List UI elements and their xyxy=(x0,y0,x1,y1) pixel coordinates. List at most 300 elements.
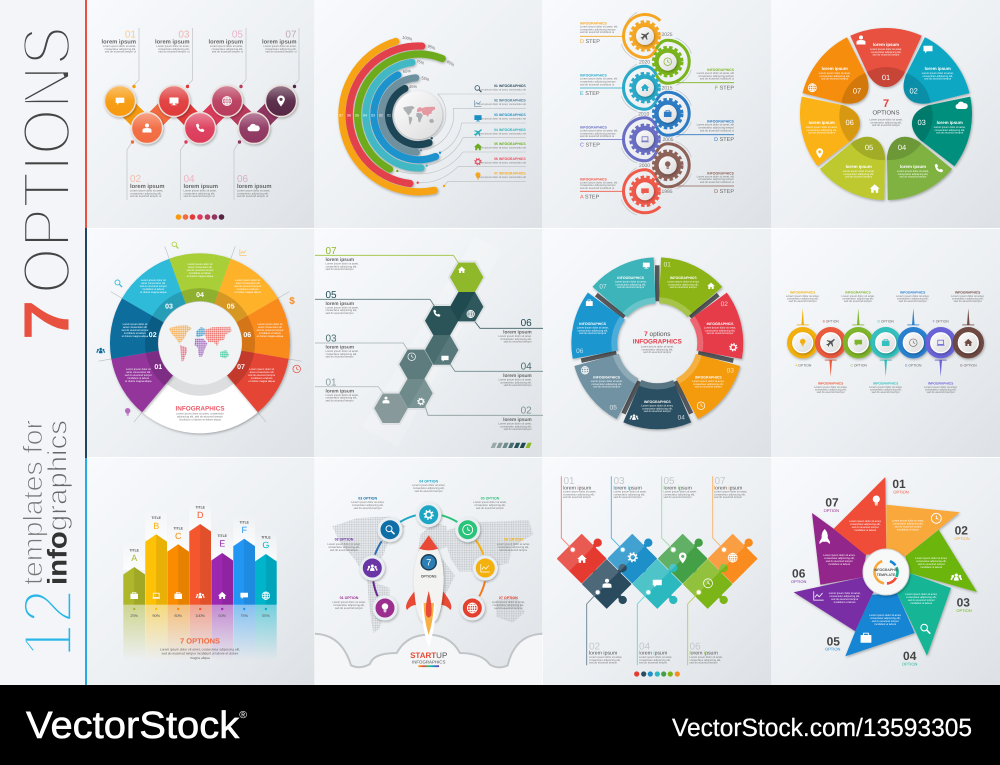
rocket nose xyxy=(419,535,438,550)
chart caption: magna aliqua xyxy=(190,656,210,660)
sector inner bands xyxy=(143,288,257,387)
hexagon icons xyxy=(383,267,474,405)
piece numbers: 04 xyxy=(639,642,651,653)
left labels: 03 xyxy=(326,334,337,344)
piece titles: lorem ipsum xyxy=(614,486,642,492)
left labels: consectetur adipiscing elit, xyxy=(326,309,357,312)
piece text: Lorem ipsum dolor sit amet, xyxy=(563,490,596,494)
left steps: E STEP xyxy=(580,91,600,97)
panel: seven section ring xyxy=(543,229,772,457)
sidebar heading: infographics: infographics xyxy=(42,420,72,585)
label 01: sed do eiusmod tempor ut xyxy=(105,51,136,54)
segment text: sed do eiusmod tempor xyxy=(579,332,606,335)
startup title: STARTUP xyxy=(410,651,447,660)
option labels xyxy=(795,320,977,368)
palette dots xyxy=(634,671,680,677)
left label text: sed do eiusmod incididunt ut xyxy=(580,135,614,138)
sector text: Lorem ipsum dolor sit xyxy=(235,279,260,282)
segment numbers: 06 xyxy=(576,348,584,355)
puzzle piece: lime xyxy=(684,560,732,608)
blade text: sed do eiusmod tempor xyxy=(908,599,935,602)
panel background xyxy=(315,0,542,228)
petal body text: sed do eiusmod tempor xyxy=(808,132,835,135)
panel background xyxy=(772,458,1000,685)
blade text: Lorem ipsum dolor sit amet, xyxy=(915,557,948,560)
sector text: Lorem ipsum dolor sit xyxy=(126,368,151,371)
option words: OPTION xyxy=(902,662,917,666)
petal body text: sed do eiusmod tempor xyxy=(924,78,951,81)
option descriptions: Lorem ipsum dolor sit amet, xyxy=(473,501,507,504)
sector text: incididunt ut labore xyxy=(251,377,273,380)
segment numbers: 07 xyxy=(599,284,607,291)
label 07: Lorem ipsum dolor sit amet, xyxy=(263,45,297,48)
sector text: et dolore magna aliqua xyxy=(122,335,149,338)
sector text: sed do eiusmod tempor xyxy=(140,285,167,288)
piece numbers: 03 xyxy=(614,476,625,487)
petal body text: Lorem ipsum dolor sit amet, xyxy=(819,72,851,75)
option numbers: 04 xyxy=(903,649,917,663)
arc numbers: 01 xyxy=(387,114,391,118)
bottom text: Lorem ipsum dolor sit amet, xyxy=(869,386,903,389)
puzzle piece: red xyxy=(558,535,606,583)
center heading: 7 options xyxy=(644,331,671,338)
right labels: lorem ipsum xyxy=(503,330,532,336)
option words: OPTION xyxy=(824,508,839,513)
divider: navy xyxy=(85,228,87,458)
bottom titles: INFOGRAPHICS xyxy=(818,382,844,386)
hex diagonal sheen xyxy=(399,292,483,423)
petal titles: lorem ipsum xyxy=(925,66,951,71)
label 01: consectetur adipiscing elit, xyxy=(104,48,136,51)
segment text xyxy=(577,280,736,413)
option descriptions: consectetur adipiscing elit, xyxy=(333,604,365,607)
petal numbers: 04 xyxy=(898,143,906,152)
option descriptions xyxy=(327,484,530,610)
bar letters: C xyxy=(175,531,182,541)
tick lines xyxy=(99,246,301,422)
option descriptions: sed do eiusmod tempor xyxy=(476,507,504,510)
panel: hexagon chain xyxy=(315,229,543,457)
option labels: C OPTION xyxy=(850,364,867,368)
white sector label: adipiscing elit, sed do eiusmod tempor xyxy=(177,416,223,418)
label 04: sed do eiusmod tempor ut xyxy=(184,195,215,198)
sector text: et dolore magna aliqua xyxy=(140,291,167,294)
puzzle piece: navy xyxy=(583,560,631,608)
faint diagonal stripe xyxy=(362,237,502,447)
option words: OPTION xyxy=(956,608,972,613)
right label text: consectetur adipiscing tempor xyxy=(698,178,734,181)
left labels: INFOGRAPHICS xyxy=(580,22,608,26)
rainbow bar xyxy=(418,665,439,667)
center world map xyxy=(403,106,435,125)
blade text: sed do eiusmod tempor xyxy=(872,620,899,623)
bottom text: Lorem ipsum dolor sit amet, xyxy=(814,386,848,389)
piece text: consectetur adipiscing elit, xyxy=(614,493,645,496)
option descriptions: consectetur adipiscing elit, xyxy=(474,504,506,507)
segment icons xyxy=(581,263,737,420)
panel background xyxy=(87,458,314,685)
dotted world map xyxy=(332,516,533,633)
bar letters: D xyxy=(197,510,204,520)
option labels: 06 OPTION xyxy=(504,538,523,542)
left label text: sed do eiusmod incididunt ut xyxy=(580,31,614,34)
right label text: consectetur adipiscing tempor xyxy=(698,126,734,130)
legend descriptions: Lorem ipsum dolor sit amet, consectetur elit xyxy=(477,176,526,179)
center heading: INFOGRAPHICS xyxy=(633,338,683,346)
right label text: Lorem ipsum dolor sit amet, elit xyxy=(697,124,734,127)
sector text: sed do eiusmod tempor xyxy=(234,285,261,288)
piece text: sed do eiusmod tempor xyxy=(614,496,642,499)
sector text: incididunt ut labore xyxy=(189,272,211,275)
years: 2015 xyxy=(661,86,673,92)
option descriptions: consectetur adipiscing elit, xyxy=(498,546,529,549)
petal body text: consectetur adipiscing elit, xyxy=(843,173,874,176)
puzzle piece: blue xyxy=(608,535,656,583)
pale backing strips xyxy=(123,500,277,570)
piece highlights xyxy=(557,534,745,596)
petal titles: lorem ipsum xyxy=(873,42,899,47)
gear icons xyxy=(641,32,671,195)
option labels: G OPTION xyxy=(960,364,977,368)
sector text: amet consectetur elit xyxy=(123,326,147,329)
option descriptions: sed do eiusmod tempor xyxy=(335,607,363,610)
right labels: consectetur adipiscing elit, xyxy=(500,381,532,384)
TITLE labels: TITLE xyxy=(151,516,162,520)
piece icons xyxy=(577,552,737,588)
top text: Lorem ipsum dolor sit amet, xyxy=(841,295,875,298)
arc numbers: 07 xyxy=(339,114,343,118)
chart caption xyxy=(160,636,240,660)
top titles: INFOGRAPHICS xyxy=(955,290,981,294)
left label text: consectetur adipiscing tempor xyxy=(580,28,616,31)
right labels: sed do eiusmod tempor xyxy=(504,428,532,431)
right labels xyxy=(707,68,735,175)
petal titles: lorem ipsum xyxy=(900,164,926,169)
label 02: sed do eiusmod tempor ut xyxy=(130,195,161,198)
blade text: Lorem ipsum dolor sit amet, xyxy=(869,614,902,617)
piece numbers: 06 xyxy=(690,642,701,653)
option circles xyxy=(104,86,296,144)
legend text: 01 INFOGRAPHICS xyxy=(494,84,526,88)
label 02 xyxy=(130,174,164,198)
striped legend xyxy=(491,443,532,448)
white sector label: Lorem ipsum dolor sit amet, consectetur xyxy=(176,412,224,416)
panel: pinwheel xyxy=(772,458,1000,685)
center colored ring xyxy=(870,556,902,588)
segment numbers: 03 xyxy=(727,368,734,375)
top text: sed do eiusmod tempor xyxy=(899,300,927,303)
center heading: sed do eiusmod tempor xyxy=(643,351,671,354)
legend text: 02 INFOGRAPHICS xyxy=(494,98,526,102)
segment text: Lorem ipsum dolor sit amet, xyxy=(704,326,736,330)
left labels: consectetur adipiscing elit, xyxy=(326,353,357,356)
segment numbers: 04 xyxy=(678,415,685,422)
right labels: INFOGRAPHICS xyxy=(707,68,735,72)
left labels: Lorem ipsum dolor sit amet, xyxy=(326,394,359,397)
label 05: sed do eiusmod tempor ut xyxy=(212,51,243,54)
petal body text: Lorem ipsum dolor sit amet, xyxy=(806,126,838,129)
left label text: consectetur adipiscing tempor xyxy=(580,80,616,84)
piece text: Lorem ipsum dolor sit amet, xyxy=(714,490,747,494)
percentage labels: 85% xyxy=(446,59,456,68)
petal titles: lorem ipsum xyxy=(846,164,872,169)
piece text: sed do eiusmod tempor xyxy=(639,662,667,665)
arc numbers: 02 xyxy=(379,114,383,118)
left labels: lorem ipsum xyxy=(326,301,354,307)
right labels: lorem ipsum xyxy=(503,417,532,423)
option words: OPTION xyxy=(954,536,970,541)
sector text: et dolore magna aliqua xyxy=(257,335,284,338)
petal titles: lorem ipsum xyxy=(937,120,963,125)
option icons xyxy=(367,510,490,613)
left labels: 01 xyxy=(326,377,337,388)
years: 2020 xyxy=(639,60,650,66)
segment numbers: 05 xyxy=(610,405,617,412)
piece titles: lorem ipsum xyxy=(690,650,718,656)
chart caption: sed do eiusmod tempor incididunt ut labore et dolore xyxy=(162,652,239,656)
sector numbers xyxy=(149,292,251,371)
petal numbers: 03 xyxy=(918,118,926,127)
blade text: Lorem ipsum dolor sit amet, xyxy=(905,593,938,596)
TITLE labels: TITLE xyxy=(261,536,271,540)
segment text: consectetur adipiscing elit, xyxy=(705,329,735,332)
label 01: lorem ipsum xyxy=(102,38,136,46)
legend descriptions: Lorem ipsum dolor sit amet, consectetur elit xyxy=(477,88,526,92)
option numbers: 07 xyxy=(825,496,839,510)
arc numbers: 04 xyxy=(363,114,367,118)
option numbers: 06 xyxy=(792,567,806,581)
label 03 xyxy=(155,30,190,54)
legend icons xyxy=(474,86,482,179)
panel: arrow bar chart xyxy=(87,458,314,685)
option descriptions: sed do eiusmod tempor xyxy=(354,507,382,510)
option labels: A OPTION xyxy=(795,364,812,368)
label 06 xyxy=(237,174,271,198)
petal body text: Lorem ipsum dolor sit amet, xyxy=(870,48,902,51)
rocket flame xyxy=(422,591,435,648)
palette dots xyxy=(176,214,224,220)
percentage labels: 55% xyxy=(421,75,430,82)
outer icons xyxy=(96,242,300,416)
petal numbers: 01 xyxy=(882,73,890,82)
blade text: consectetur adipiscing elit, xyxy=(906,596,937,599)
sector numbers: 03 xyxy=(165,304,173,310)
concentric arcs xyxy=(342,41,442,192)
value labels: 60% xyxy=(174,614,183,618)
sidebar background xyxy=(0,0,85,685)
leader lines xyxy=(315,255,543,415)
legend text: 03 INFOGRAPHICS xyxy=(494,113,526,117)
blade text: consectetur adipiscing elit, xyxy=(850,523,881,526)
left steps xyxy=(580,39,600,200)
option labels: F OPTION xyxy=(933,320,949,324)
option words xyxy=(791,490,972,666)
hexagons xyxy=(374,263,483,423)
sector numbers: 01 xyxy=(154,364,162,371)
left labels: INFOGRAPHICS xyxy=(580,126,608,130)
left label text: Lorem ipsum dolor sit amet, elit xyxy=(580,181,618,184)
value labels: 75% xyxy=(240,614,249,618)
rocket fins xyxy=(406,591,451,610)
right label text: Lorem ipsum dolor sit amet, elit xyxy=(697,175,734,178)
startup title xyxy=(410,651,447,664)
sidebar heading: 12: 12 xyxy=(9,589,87,658)
blade text: sed do eiusmod tempor xyxy=(918,563,945,566)
top text xyxy=(786,295,985,303)
right steps: D STEP xyxy=(714,137,734,143)
option words: OPTION xyxy=(791,579,806,584)
blade icons xyxy=(814,495,962,643)
bottom text: consectetur adipiscing elit, xyxy=(870,388,902,392)
option descriptions: sed do eiusmod tempor xyxy=(499,549,527,552)
option numbers: 05 xyxy=(827,634,840,648)
colored world map xyxy=(169,325,232,362)
blade text: incididunt ut labore xyxy=(874,623,897,626)
sector text: amet consectetur elit xyxy=(141,282,166,285)
left labels: 05 xyxy=(326,290,337,301)
label 03: 03 xyxy=(178,30,190,40)
option labels: D OPTION xyxy=(877,320,894,324)
top text: Lorem ipsum dolor sit amet, xyxy=(896,295,930,298)
sector text: amet consectetur elit xyxy=(236,282,260,285)
left label text: Lorem ipsum dolor sit amet, elit xyxy=(580,26,618,28)
panel: gear timeline xyxy=(543,0,772,228)
legend descriptions: Lorem ipsum dolor sit amet, consectetur elit xyxy=(477,161,526,164)
sector text: incididunt ut labore xyxy=(127,377,150,380)
segment text: Lorem ipsum dolor sit amet, xyxy=(667,280,700,284)
gear hubs xyxy=(636,27,677,200)
center text: TEMPLATE xyxy=(877,573,896,577)
sidebar heading: 7: 7 xyxy=(10,300,82,340)
thin grey arcs xyxy=(621,12,691,215)
petal body text: consectetur adipiscing elit, xyxy=(898,173,928,176)
bar letters: B xyxy=(153,521,159,531)
center heading: Lorem ipsum dolor sit amet, xyxy=(869,118,903,122)
panel background xyxy=(87,229,314,457)
label 01: Lorem ipsum dolor sit amet, xyxy=(103,45,136,48)
option descriptions: consectetur adipiscing elit, xyxy=(413,487,445,490)
petal tabs xyxy=(836,67,936,165)
startup title: INFOGRAPHICS xyxy=(412,660,445,664)
label 02: consectetur adipiscing elit, xyxy=(130,192,162,195)
sector text: Lorem ipsum dolor sit xyxy=(188,263,213,266)
petal body text: consectetur adipiscing elit, xyxy=(806,129,837,132)
right steps xyxy=(714,86,734,195)
zigzag connectors xyxy=(120,101,281,128)
label 01: 01 xyxy=(125,30,136,40)
arc numbers xyxy=(339,114,391,118)
white sector label: INFOGRAPHICS xyxy=(176,406,225,412)
legend descriptions: Lorem ipsum dolor sit amet, consectetur elit xyxy=(477,118,526,120)
petal body text: consectetur adipiscing elit, xyxy=(871,51,901,54)
sector text xyxy=(121,263,284,383)
option labels xyxy=(335,479,523,600)
option labels: 01 OPTION xyxy=(340,596,359,600)
TITLE labels: TITLE xyxy=(129,548,140,552)
blade text: consectetur adipiscing elit, xyxy=(893,522,923,526)
segment titles: INFOGRAPHICS xyxy=(579,322,607,326)
piece text: consectetur adipiscing elit, xyxy=(664,493,695,496)
rocket window xyxy=(421,555,436,570)
sector text: Lorem ipsum dolor sit xyxy=(258,323,283,326)
sector numbers: 06 xyxy=(243,332,251,339)
top text: consectetur adipiscing elit, xyxy=(787,298,819,300)
left labels: INFOGRAPHICS xyxy=(580,74,608,78)
left labels: consectetur adipiscing elit, xyxy=(326,265,357,268)
top text: consectetur adipiscing elit, xyxy=(842,298,874,300)
center heading xyxy=(869,98,903,127)
sector numbers: 07 xyxy=(237,364,245,371)
panel: timeline of round buttons xyxy=(87,0,314,228)
top titles xyxy=(790,290,981,294)
option numbers: 02 xyxy=(955,523,968,537)
TITLE labels xyxy=(129,506,271,552)
label 07 xyxy=(262,30,297,54)
bar letters: A xyxy=(131,553,137,563)
right steps: F STEP xyxy=(715,86,734,92)
piece text: consectetur adipiscing elit, xyxy=(639,659,671,662)
right labels: INFOGRAPHICS xyxy=(707,171,735,175)
left labels: sed do eiusmod tempor xyxy=(326,399,354,402)
center heading: consectetur adipiscing elit, xyxy=(870,121,902,124)
hexagon halo xyxy=(374,263,483,423)
option numbers: 01 xyxy=(892,477,906,491)
center text: INFOGRAPHIC xyxy=(874,568,899,572)
divider: red xyxy=(85,0,87,228)
center heading: 7 xyxy=(883,98,889,110)
rocket window number: 7 xyxy=(426,558,431,568)
white sector xyxy=(142,374,258,433)
segment text: consectetur adipiscing elit, xyxy=(577,329,608,332)
segment text: consectetur adipiscing elit, xyxy=(693,383,724,386)
piece titles: lorem ipsum xyxy=(589,650,617,656)
label 07: sed do eiusmod tempor ut xyxy=(265,51,297,54)
petal body text: Lorem ipsum dolor sit amet, xyxy=(897,170,929,173)
leader rings xyxy=(570,547,726,595)
legend text xyxy=(494,84,526,175)
segment text: consectetur adipiscing elit, xyxy=(668,283,699,286)
segment titles: INFOGRAPHICS xyxy=(695,376,722,380)
value labels: 50% xyxy=(218,614,227,618)
piece text xyxy=(563,490,747,665)
right label text: Lorem ipsum dolor sit amet, elit xyxy=(697,72,734,75)
label 07: 07 xyxy=(285,30,297,40)
left label text xyxy=(580,26,618,190)
legend text: 07 INFOGRAPHICS xyxy=(494,171,526,175)
left labels: lorem ipsum xyxy=(326,344,354,350)
piece text: Lorem ipsum dolor sit amet, xyxy=(614,490,647,494)
option numbers: 03 xyxy=(957,595,970,609)
left labels: Lorem ipsum dolor sit amet, xyxy=(326,306,359,309)
left label text: sed do eiusmod incididunt ut xyxy=(580,83,614,86)
circle icons xyxy=(116,96,285,132)
bar icons xyxy=(130,592,270,599)
outer icons: $ xyxy=(289,296,295,307)
piece text: consectetur adipiscing elit, xyxy=(714,493,746,496)
years: 2010 xyxy=(638,112,649,118)
leader lines xyxy=(561,476,724,665)
bars xyxy=(123,524,277,605)
segment text: Lorem ipsum dolor sit amet, xyxy=(577,326,609,330)
petal titles: lorem ipsum xyxy=(822,66,848,71)
top text: sed do eiusmod tempor xyxy=(954,300,982,303)
top titles: INFOGRAPHICS xyxy=(790,290,816,294)
rings xyxy=(787,327,984,358)
right labels: sed do eiusmod tempor xyxy=(504,384,532,387)
legend text: 04 INFOGRAPHICS xyxy=(494,128,526,132)
left labels: Lorem ipsum dolor sit amet, xyxy=(326,262,359,266)
panel: seven petal circle xyxy=(772,0,1000,228)
